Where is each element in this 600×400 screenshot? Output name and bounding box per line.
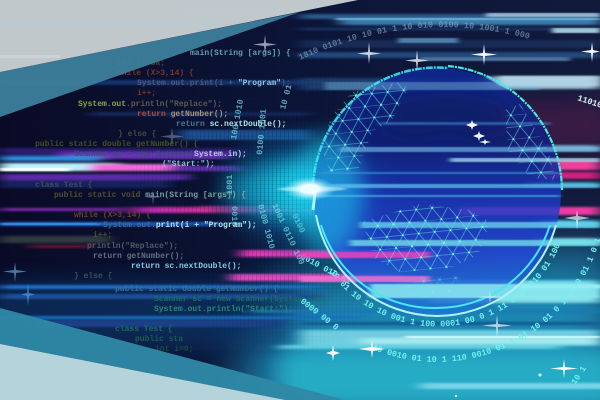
binary digit columns near flare: 1001 [225, 175, 235, 195]
binary digit columns near flare: 100 1010 [229, 99, 246, 141]
globe dark continents [380, 92, 520, 140]
code text, upper block: return getNumber(); [137, 110, 228, 119]
globe [293, 66, 600, 316]
curved binary rings: 10 01 10 10 10 001 1 100 0001 00 0 1 11 0010 010 01 100 0001 01 [330, 244, 560, 326]
code text, lower block: i++; [93, 231, 112, 240]
code text, upper block: while (X>3,14) { [117, 69, 194, 78]
code text, lower block: class Test { [115, 325, 173, 334]
binary digit columns near flare: 10 01 [278, 84, 295, 111]
code text, upper block: ic Scanner(System.in); [184, 8, 290, 17]
code text, lower block: Scanner sc = new Scanner(System.in); [154, 295, 327, 304]
lower right teal glow [0, 100, 600, 400]
code text, upper block: public static void main(String [args]) { [54, 191, 246, 200]
teal band [0, 12, 300, 117]
code text, upper block: i++; [137, 89, 156, 98]
curved binary rings: 10 1 [572, 366, 586, 384]
binary digit columns near flare: 1001 0110 100 [269, 202, 306, 266]
curved binary rings: 10 0010 01 10 1 110 0010 01 1 01 10 01 0 1 1000 01 1 0 1 00 1 [374, 238, 600, 362]
mesh upper right [505, 104, 556, 180]
code text, lower block: return getNumber(); [93, 252, 184, 261]
pale wedge [0, 344, 285, 400]
code text, upper block: } else { [118, 130, 157, 139]
globe rim [316, 215, 556, 316]
teal band [0, 308, 345, 400]
code text, lower block [74, 211, 327, 354]
code text, upper block: class Test { [35, 181, 93, 190]
binary digit columns near flare: 0100 1010 [255, 203, 277, 250]
code text, upper block: Scanner sc = new Scanner(System.in); [74, 150, 247, 159]
globe light streaks [300, 76, 600, 298]
code text, upper block: return sc.nextDouble(); [176, 120, 286, 129]
globe left glow [293, 135, 363, 255]
code text, lower block: int i=0; [155, 345, 193, 354]
binary digit columns near flare: 0010 [229, 206, 239, 226]
curved binary rings: 1810 0101 10 10 01 1 10 010 0100 10 1001 1 000 [298, 21, 530, 60]
code text, upper block: System.out.println("Replace"); [78, 100, 222, 109]
flare glow [205, 118, 405, 262]
code text, lower block: System.out.println("Start:"); [154, 305, 293, 314]
mesh lower centre [362, 204, 490, 272]
code text, lower block: System.out.print(i + "Program"); [103, 221, 257, 230]
curved binary rings: 0010 010 01 [299, 252, 353, 287]
code text, upper block [35, 8, 291, 200]
code text, lower block: println("Replace"); [87, 242, 178, 251]
mesh upper left [322, 82, 408, 172]
code text, upper block: int i, sa; [117, 59, 165, 68]
code text, upper block: public static double getNumber() { [35, 140, 198, 149]
code text, lower block: public sta [135, 335, 183, 344]
top left light panel [0, 0, 358, 117]
code text, lower block: } else { [74, 272, 113, 281]
curved binary rings: 0000 00 0 [298, 296, 340, 333]
lens flare core [278, 177, 346, 201]
code text, upper block: main(String [args]) { [190, 49, 291, 58]
light grey wedge [0, 0, 358, 72]
binary digit columns near flare: 0100 [289, 212, 307, 235]
vertical scan grid [132, 80, 357, 336]
code text, upper block: System.out.print(i + "Program"); [137, 79, 291, 88]
binary digit columns near flare: 0100 1001 [255, 109, 269, 155]
code text, lower block: return sc.nextDouble(); [131, 262, 241, 271]
code text, lower block: public static double getNumber() { [115, 285, 278, 294]
code text, upper block: ("Start:"); [162, 160, 215, 169]
binary digit columns near flare [225, 84, 307, 266]
bottom left light panel [0, 308, 345, 400]
code text, lower block: while (X>3,14) { [74, 211, 151, 220]
globe body [313, 68, 561, 316]
